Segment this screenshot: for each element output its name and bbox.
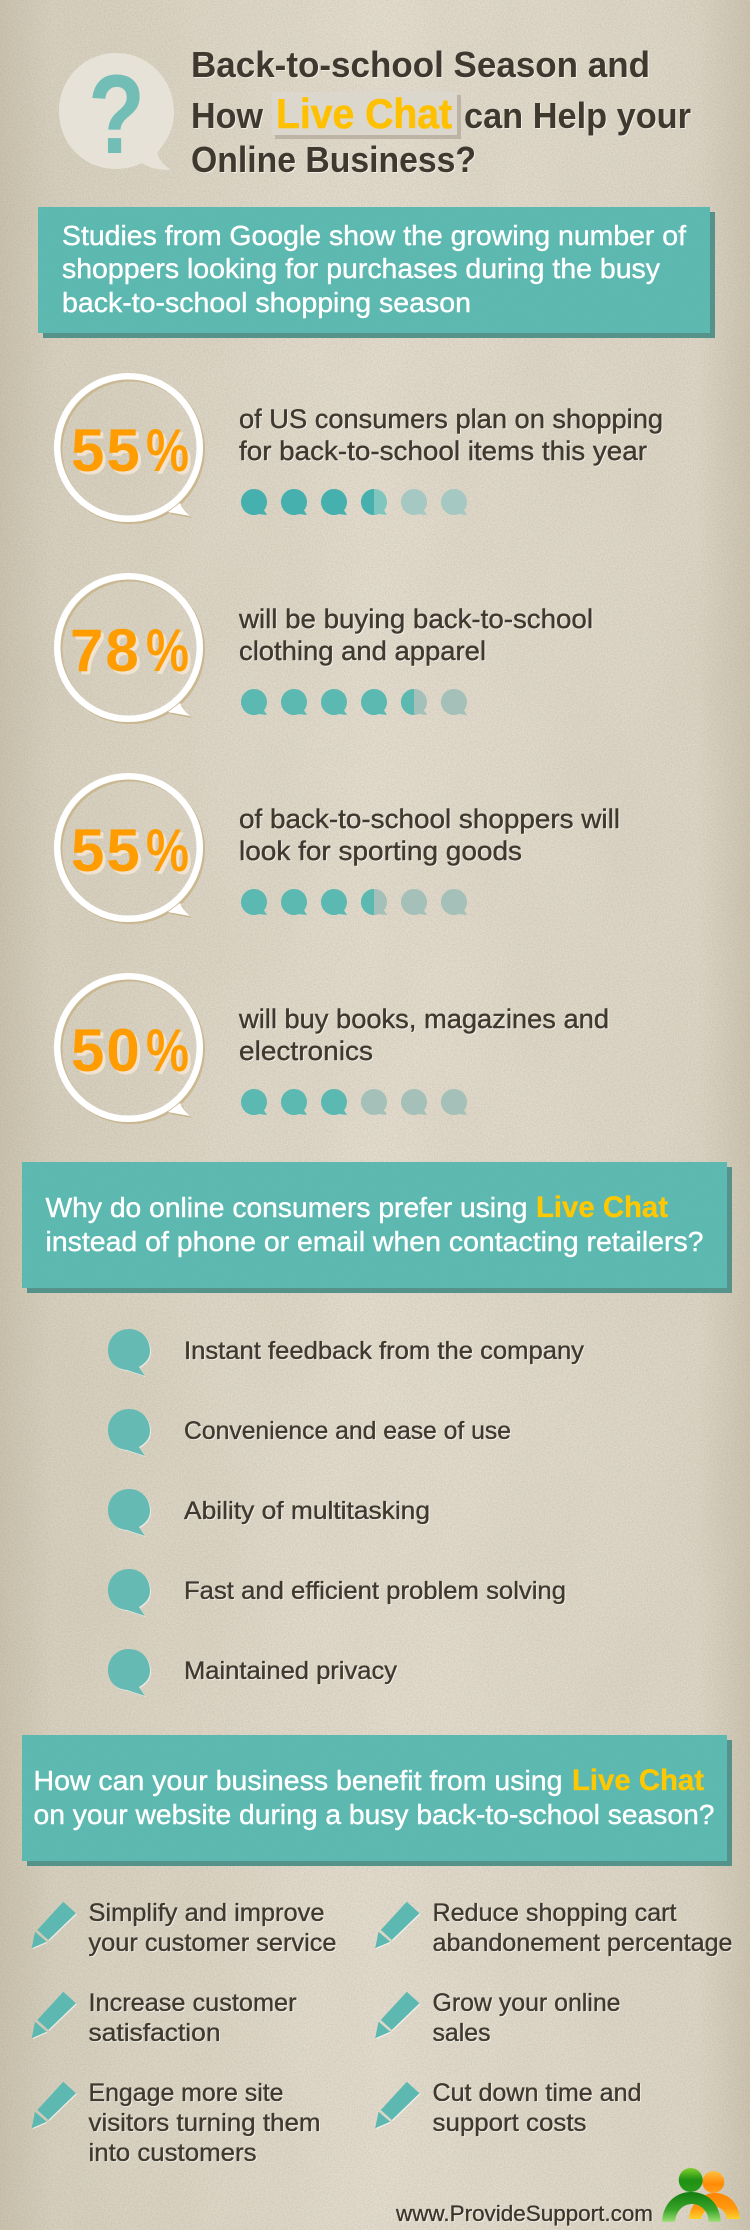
percent bubble (57, 576, 200, 719)
benefit: grow sales: sales (432, 2019, 490, 2047)
reason 2 (108, 1409, 511, 1456)
reason 3 (108, 1489, 430, 1536)
benefit: cut costs: support costs (432, 2109, 586, 2137)
panel: business benefit banner (22, 1735, 732, 1866)
panel: intro banner (38, 207, 715, 338)
percent bubble (57, 976, 200, 1119)
stat description: will buy books, magazines and (238, 1004, 609, 1034)
benefit: reduce abandonment: Reduce shopping cart (432, 1899, 677, 1927)
panel: why live chat banner: Why do online consumers prefer using (46, 1192, 528, 1223)
benefit: satisfaction: Increase customer (88, 1989, 296, 2017)
benefit: simplify: Simplify and improve (88, 1899, 324, 1927)
stat description (238, 604, 593, 666)
benefit: cut costs: Cut down time and (432, 2079, 642, 2107)
percent bubble: 55 (71, 817, 142, 884)
benefit: grow sales (375, 1989, 620, 2047)
list: benefits (32, 1899, 732, 2167)
rating dots (241, 1089, 467, 1115)
panel: why live chat banner: Live Chat (536, 1191, 668, 1224)
benefit: satisfaction (32, 1989, 296, 2047)
benefit: engage visitors: into customers (88, 2139, 256, 2167)
panel: intro banner: Studies from Google show the growing number of (62, 220, 686, 251)
rating dots (241, 889, 467, 915)
reason 4: Fast and efficient problem solving (184, 1577, 566, 1605)
benefit: reduce abandonment (375, 1899, 732, 1957)
stat description: for back-to-school items this year (239, 436, 647, 466)
panel: why live chat banner: instead of phone or email when contacting retailers? (46, 1226, 703, 1257)
benefit: satisfaction: satisfaction (88, 2019, 220, 2047)
panel: business benefit banner: How can your business benefit from using (34, 1765, 562, 1796)
footer url: www.ProvideSupport.com (395, 2201, 653, 2226)
stat description (239, 404, 663, 466)
stat: 55% US consumers (57, 376, 663, 519)
stat description (239, 804, 620, 866)
percent bubble: 78 (70, 617, 141, 684)
title (191, 44, 691, 180)
reason 5 (108, 1649, 398, 1696)
rating dots (241, 489, 467, 515)
icon: question mark speech bubble (59, 52, 174, 177)
stat description: clothing and apparel (239, 636, 486, 666)
header: title and question bubble (59, 44, 691, 180)
panel: business benefit banner: on your website during a busy back-to-school season? (34, 1799, 714, 1830)
benefit: engage visitors: visitors turning them (88, 2109, 320, 2137)
percent bubble (57, 776, 200, 919)
benefit: engage visitors (32, 2079, 320, 2167)
benefit: engage visitors: Engage more site (88, 2079, 284, 2107)
reason 5: Maintained privacy (184, 1657, 398, 1685)
rating dots (241, 689, 467, 715)
reason 2: Convenience and ease of use (184, 1417, 511, 1445)
percent bubble: % (146, 617, 189, 684)
reason 4 (108, 1569, 566, 1616)
stat description: look for sporting goods (239, 836, 522, 866)
list: reasons for preferring live chat (108, 1329, 585, 1696)
title: How (191, 95, 264, 136)
stat description (238, 1004, 609, 1066)
benefit: simplify: your customer service (88, 1929, 336, 1957)
title: Back-to-school Season and (191, 44, 650, 85)
reason 3: Ability of multitasking (184, 1497, 430, 1525)
percent bubble: 50 (71, 1017, 142, 1084)
benefit: grow sales: Grow your online (432, 1989, 620, 2017)
percent bubble: % (146, 1017, 189, 1084)
percent bubble: % (146, 417, 189, 484)
percent bubble: % (146, 817, 189, 884)
panel: intro banner: back-to-school shopping season (62, 287, 471, 318)
percent bubble (57, 376, 200, 519)
stat description: will be buying back-to-school (238, 604, 593, 634)
stat: 55% sporting goods (57, 776, 620, 919)
stat description: of US consumers plan on shopping (239, 404, 663, 434)
title: can Help your (464, 95, 691, 136)
reason 1: Instant feedback from the company (184, 1337, 585, 1365)
panel: why live chat banner (22, 1162, 732, 1293)
benefit: simplify (32, 1899, 336, 1957)
highlight: Live Chat: Live Chat (276, 90, 452, 137)
benefit: reduce abandonment: abandonement percentage (432, 1929, 732, 1957)
icon: question mark speech bubble: ? (88, 52, 145, 177)
stat description: of back-to-school shoppers will (239, 804, 620, 834)
panel: intro banner: shoppers looking for purchases during the busy (62, 253, 660, 284)
panel: business benefit banner: Live Chat (572, 1764, 704, 1797)
reason 1 (108, 1329, 585, 1376)
stat description: electronics (239, 1036, 373, 1066)
title: Online Business? (191, 139, 476, 180)
stat: 50% books (57, 976, 609, 1119)
benefit: cut costs (375, 2079, 642, 2137)
percent bubble: 55 (71, 417, 142, 484)
stat: 78% clothing (57, 576, 593, 719)
icon: ProvideSupport logo (662, 2168, 740, 2222)
